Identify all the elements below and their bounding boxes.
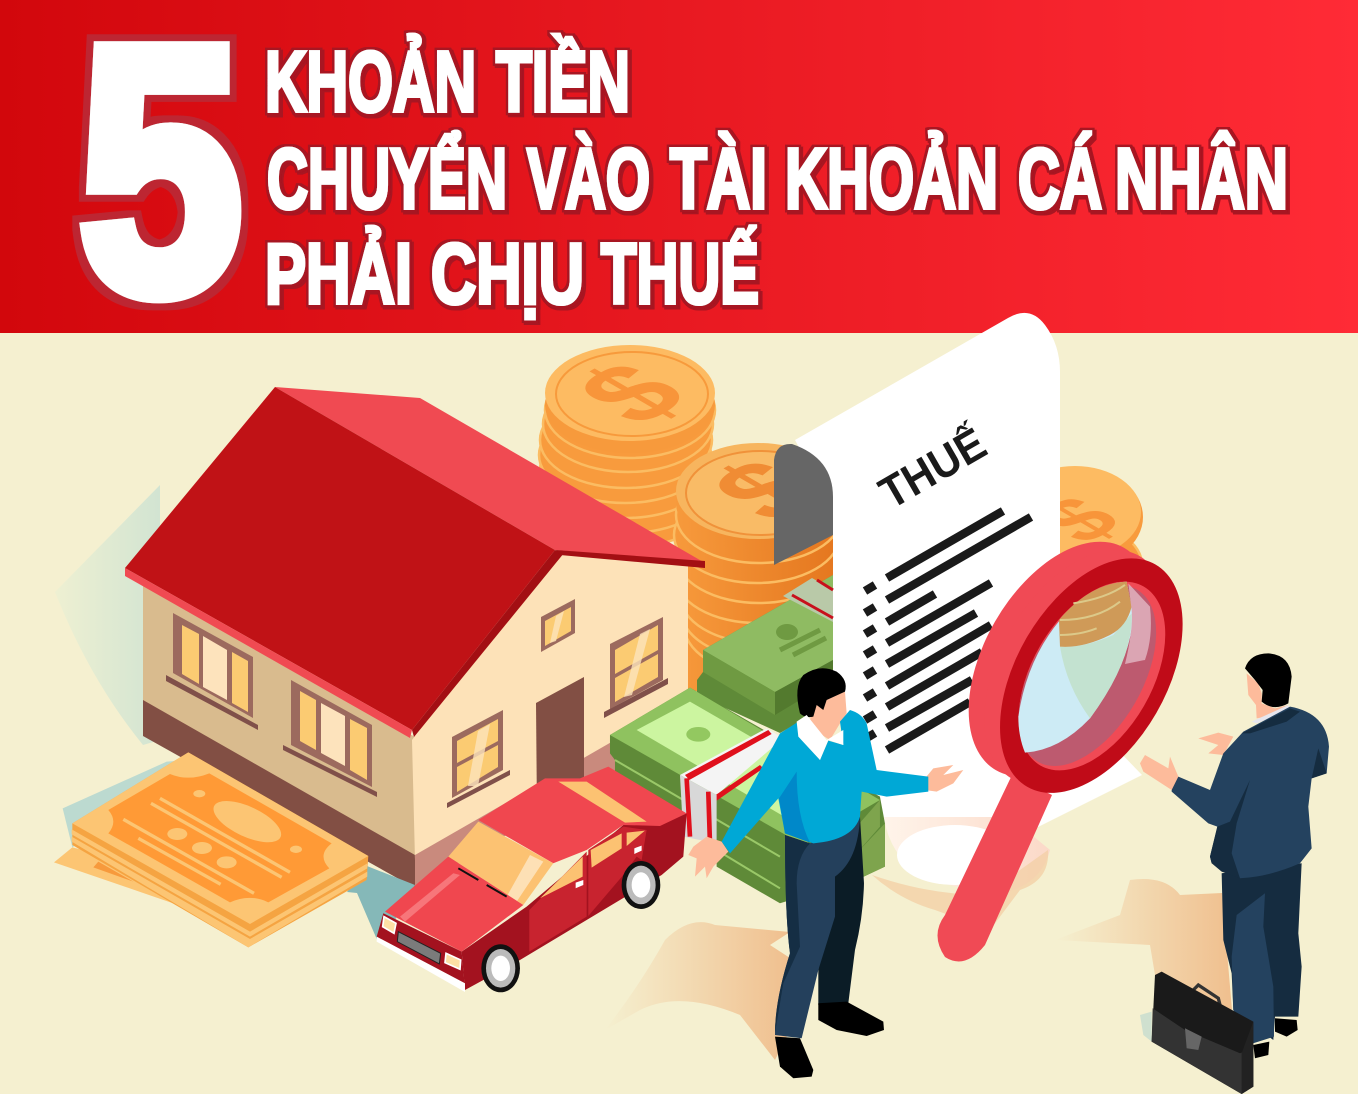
- title: NHÂN: [1115, 131, 1288, 227]
- back hand: [1198, 733, 1233, 755]
- wipers: [458, 868, 507, 897]
- tax document: [774, 313, 1142, 846]
- hair: [1245, 653, 1292, 707]
- coin stack middle: [674, 442, 848, 700]
- house ground shadow: [55, 485, 160, 745]
- suit trousers: [1222, 863, 1302, 1040]
- shoes: [818, 1002, 884, 1036]
- man 1 ground shadow: [605, 922, 790, 1060]
- hands: [925, 765, 963, 792]
- roof side strip: [275, 387, 705, 563]
- headlights: [383, 917, 396, 933]
- green money back stack: [697, 575, 833, 733]
- left foundation: [143, 700, 415, 888]
- money band: [680, 728, 783, 795]
- title: VÀO: [527, 132, 650, 227]
- header banner: [0, 0, 1358, 333]
- main roof: [125, 387, 555, 730]
- shoes: [1275, 1018, 1298, 1037]
- pale shadow: [63, 760, 190, 847]
- title: CHỊU: [431, 227, 584, 322]
- windshield: [448, 822, 553, 905]
- coin stack small behind paper: $: [1017, 483, 1142, 556]
- loose note: [54, 847, 173, 903]
- attic window: [541, 599, 575, 652]
- title: CÁ: [1018, 132, 1102, 227]
- hood: [385, 857, 523, 952]
- grille: [397, 932, 441, 964]
- front leg: [775, 817, 860, 1038]
- green money front stack: [610, 688, 885, 903]
- roof and trunk: [478, 767, 687, 863]
- magnifier shadow on paper: [872, 817, 1050, 930]
- title: PHẢI: [265, 226, 412, 322]
- window left 1: [166, 613, 258, 730]
- lens frame ring: [962, 527, 1220, 824]
- coin stack back: [539, 345, 715, 548]
- paper sheet: [795, 313, 1142, 846]
- document bullets: [865, 585, 875, 739]
- lens frame outer: [931, 510, 1189, 808]
- doors: [529, 852, 587, 952]
- title: KHOẢN: [265, 34, 476, 130]
- coin stack back: $: [549, 345, 714, 441]
- window front low: [447, 710, 510, 808]
- title: [265, 34, 1288, 322]
- handle: [938, 775, 1052, 961]
- title: TIỀN: [496, 34, 630, 130]
- side windows: [540, 857, 583, 898]
- door: [536, 677, 584, 815]
- paper fold: [774, 444, 833, 565]
- rear and side shell: [462, 813, 687, 990]
- neck and face: [808, 692, 847, 740]
- title: KHOẢN: [785, 131, 998, 227]
- roof stripe: [558, 782, 647, 823]
- man in blue sweater: [688, 668, 963, 1078]
- document lines: [887, 511, 1031, 750]
- lens glass: [990, 562, 1185, 789]
- bumper: [377, 937, 465, 992]
- teal shadow by bills: [347, 866, 415, 942]
- hair: [797, 668, 846, 717]
- man in dark suit: [1140, 653, 1329, 1094]
- red car: [377, 767, 687, 992]
- coin stack small behind paper: [1009, 466, 1143, 632]
- note print: [108, 773, 332, 902]
- front wheel: [481, 944, 520, 992]
- front wall: [412, 552, 688, 860]
- left wall: [143, 580, 415, 860]
- window front far: [604, 617, 668, 718]
- orange banknotes: [54, 752, 368, 947]
- title: THUẾ: [601, 226, 759, 322]
- door handles: [576, 880, 583, 888]
- shirt collar: [1252, 705, 1290, 723]
- back leg: [818, 817, 864, 1005]
- title: CHUYỂN: [267, 131, 507, 227]
- face: [1247, 673, 1288, 718]
- front foundation: [415, 698, 688, 888]
- jacket: [1172, 707, 1329, 878]
- document heading: THUẾ: [870, 417, 995, 519]
- note stack: [72, 752, 368, 947]
- sweater: [722, 710, 928, 853]
- rear wheel: [622, 861, 660, 909]
- front hand: [1140, 755, 1178, 790]
- house: [125, 387, 705, 888]
- title: TÀI: [670, 132, 767, 227]
- window left 2: [283, 680, 377, 797]
- man 2 ground shadow: [1055, 879, 1232, 1010]
- briefcase: [1140, 972, 1253, 1094]
- front face: [377, 913, 465, 988]
- collar: [797, 715, 843, 760]
- coin stack middle: $: [683, 442, 848, 538]
- magnifying glass: [931, 510, 1220, 961]
